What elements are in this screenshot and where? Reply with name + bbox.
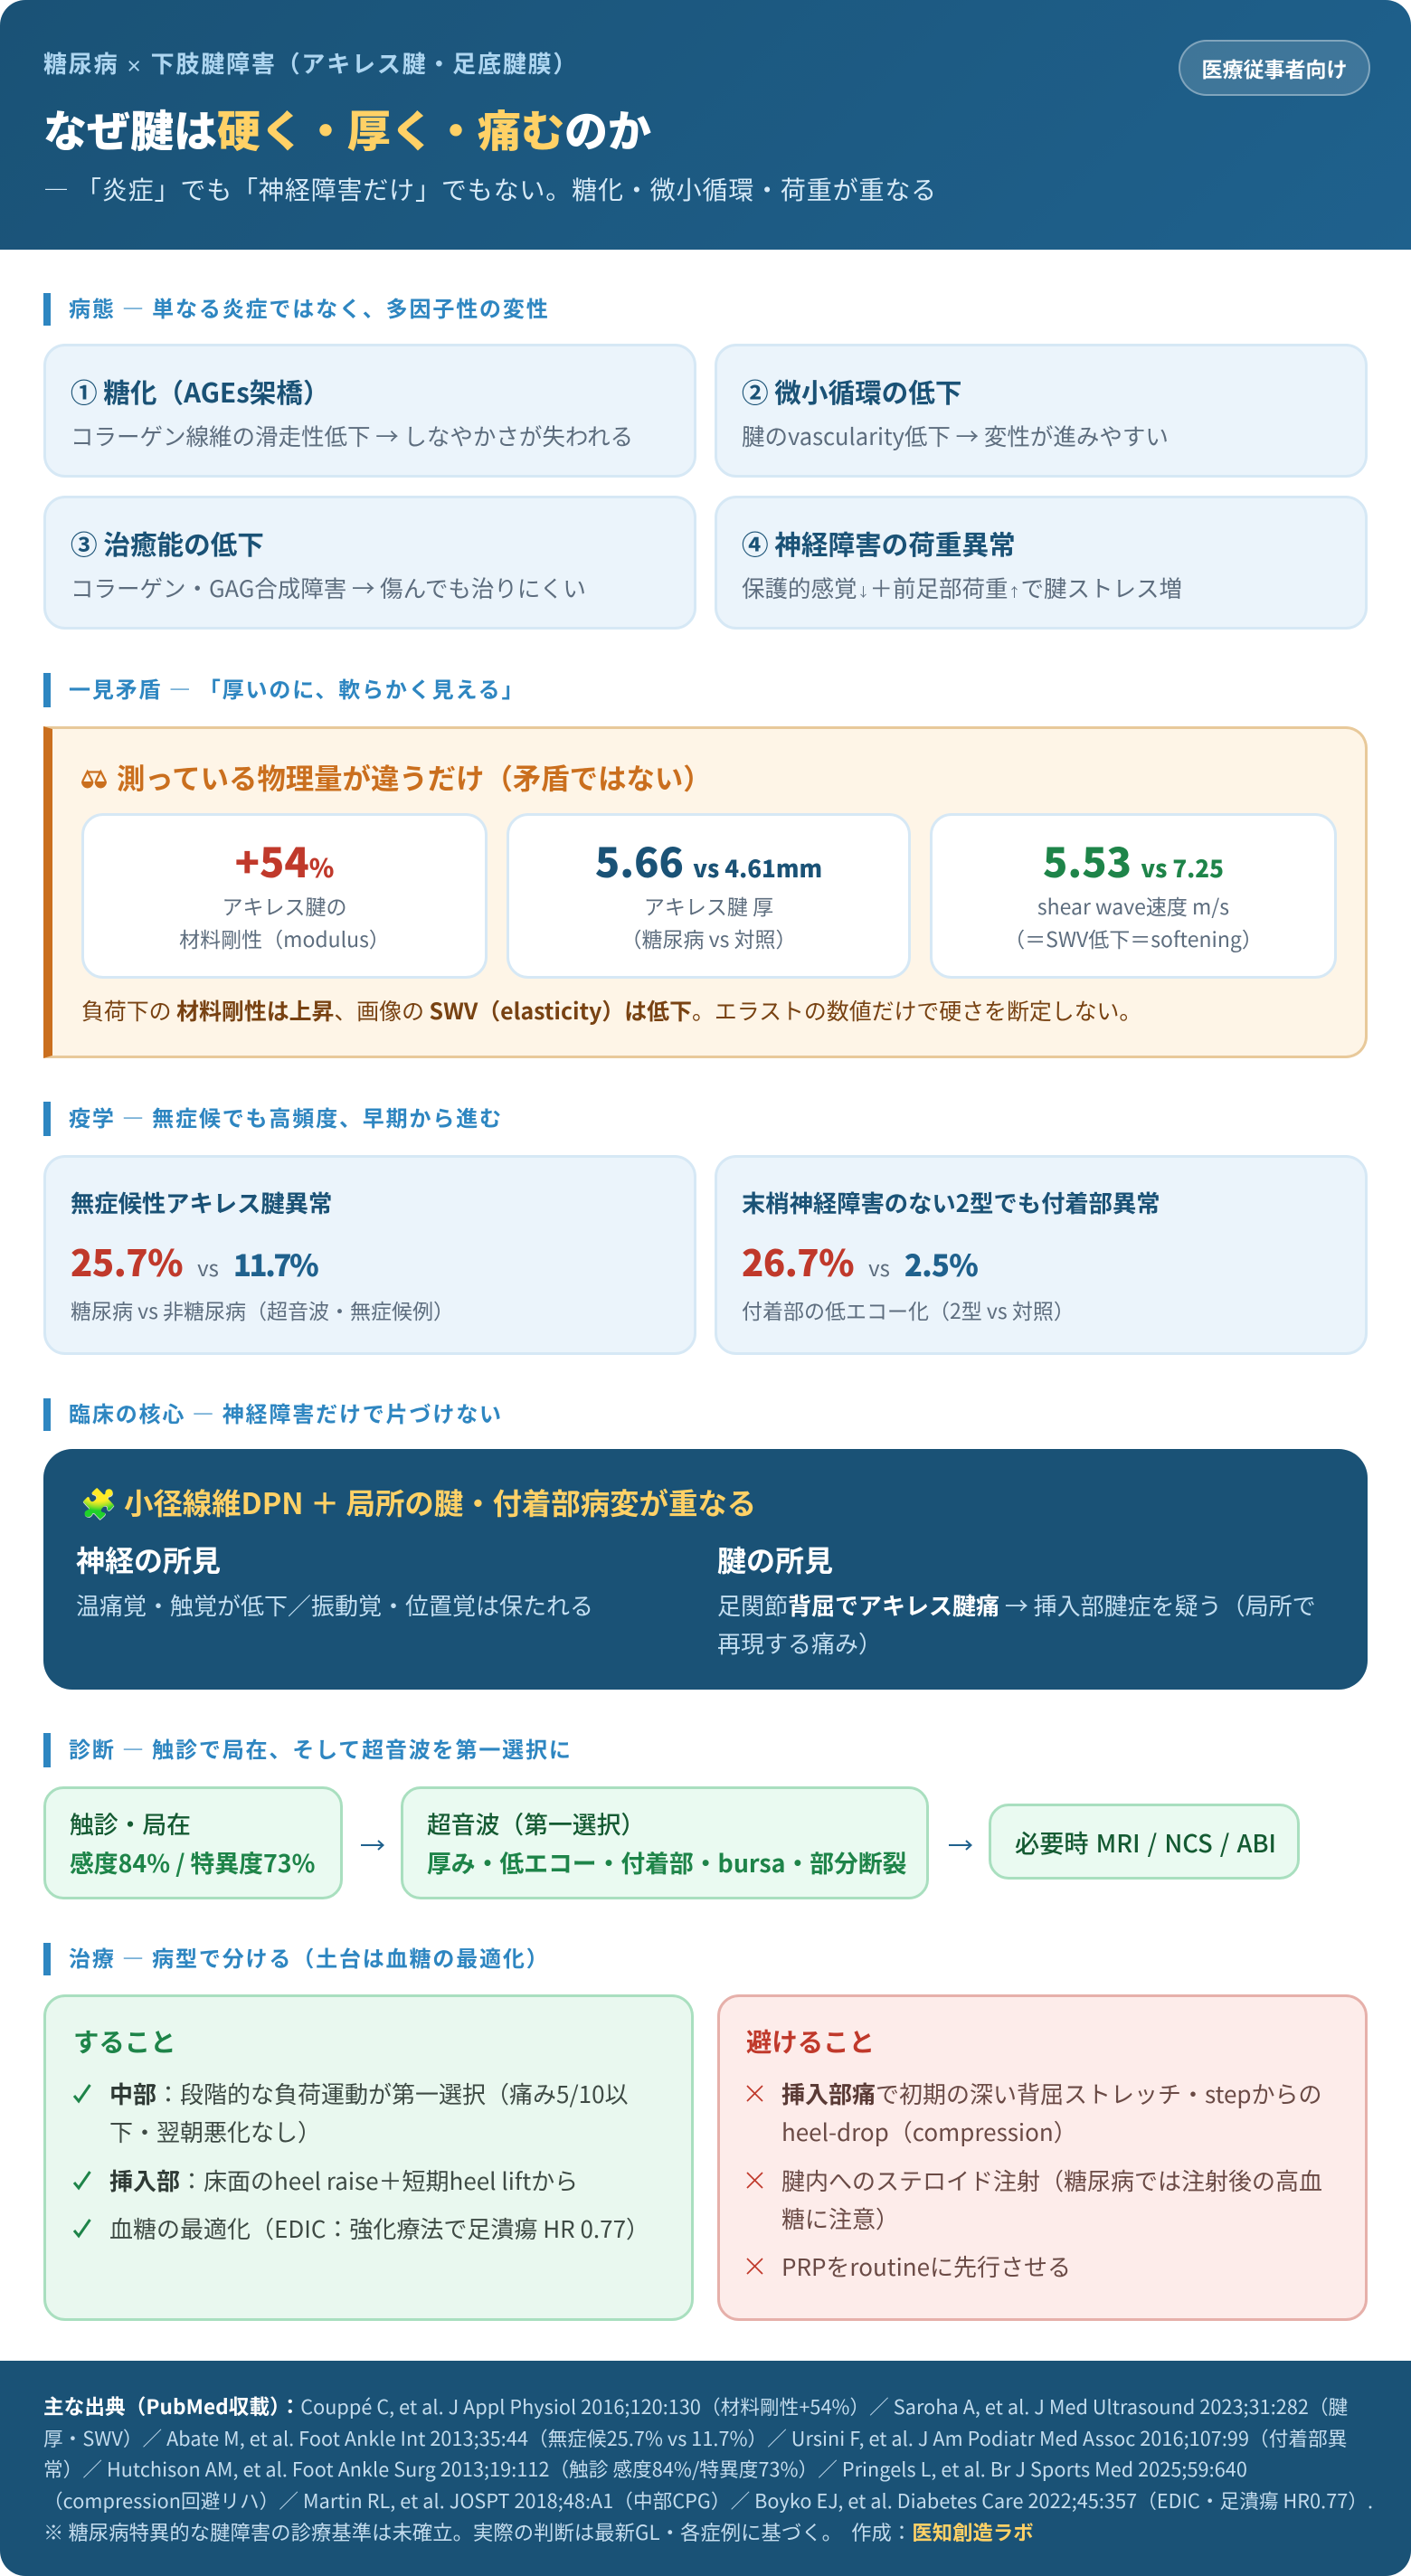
check mark [72, 2171, 91, 2191]
panel heading: 避けること [746, 2022, 875, 2060]
reference list: 常）／ Hutchison AM, et al. Foot Ankle Surg 2013;19:112（触診 感度84%/特異度73%）／ Pringels L, et al. Br J Sports Med 2025;59:640 [43, 2455, 1247, 2483]
panel: clinical core [43, 1449, 1368, 1690]
stat label: アキレス腱 厚 [644, 890, 773, 921]
item text [781, 2077, 1322, 2148]
section heading: epidemiology: 疫学 — 無症候でも高頻度、早期から進む [69, 1101, 503, 1132]
flow step: palpation [43, 1786, 343, 1899]
panel: avoid [717, 1994, 1368, 2321]
item text: 血糖の最適化（EDIC：強化療法で足潰瘍 HR 0.77） [109, 2211, 649, 2245]
flow step: ultrasound [401, 1786, 929, 1899]
panel title with puzzle icon: 小径線維DPN ＋ 局所の腱・付着部病変が重なる [124, 1481, 756, 1523]
item text: 糖に注意） [781, 2202, 899, 2235]
step detail: 感度84% / 特異度73% [70, 1844, 315, 1880]
reference list [43, 2391, 1373, 2546]
step title: 触診・局在 [70, 1805, 191, 1841]
stat label line 2: （糖尿病 vs 対照） [620, 923, 797, 953]
column heading: 神経の所見 [76, 1539, 221, 1580]
reference list: （compression回避リハ）／ Martin RL, et al. JOSPT 2018;48:A1（中部CPG）／ Boyko EJ, et al. Diabetes Care 2022;45:357（EDIC・足潰瘍 HR0.77）. [43, 2486, 1373, 2514]
card title: ② 微小循環の低下 [742, 372, 961, 411]
column: tendon findings [717, 1539, 1316, 1660]
column text: 足関節背屈でアキレス腱痛 → 挿入部腱症を疑う（局所で [717, 1588, 1316, 1622]
column heading: 腱の所見 [717, 1539, 833, 1580]
card body: コラーゲン・GAG合成障害 → 傷んでも治りにくい [71, 571, 586, 604]
audience badge [1179, 40, 1370, 96]
cross mark [747, 2085, 763, 2102]
comparison numbers: 26.7% vs 2.5% [742, 1235, 978, 1287]
item text: 挿入部：床面のheel raise＋短期heel liftから [109, 2164, 578, 2197]
section heading: pathology [43, 293, 948, 326]
stat label: アキレス腱の [223, 890, 347, 921]
card title: 無症候性アキレス腱異常 [71, 1184, 332, 1219]
card title: ④ 神経障害の荷重異常 [742, 524, 1016, 563]
arrow [949, 1840, 972, 1851]
section heading: pathology: 病態 — 単なる炎症ではなく、多因子性の変性 [69, 291, 550, 323]
stat label line 2: 材料剛性（modulus） [179, 923, 390, 953]
cross mark [747, 2258, 763, 2275]
comparison numbers: 25.7% vs 11.7% [71, 1235, 317, 1287]
panel: do [43, 1994, 694, 2321]
stat: thickness [507, 813, 911, 979]
card title: ① 糖化（AGEs架橋） [71, 372, 330, 411]
stat value: +54% [235, 830, 334, 889]
step detail: 厚み・低エコー・付着部・bursa・部分断裂 [427, 1844, 906, 1880]
card body: 腱のvascularity低下 → 変性が進みやすい [742, 419, 1169, 452]
section heading: apparent contradiction [43, 673, 948, 707]
title: なぜ腱は硬く・厚く・痛むのか [43, 96, 651, 159]
panel note: 負荷下の 材料剛性は上昇、画像の SWV（elasticity）は低下。エラストの数値だけで硬さを断定しない。 [81, 994, 1141, 1027]
section heading: apparent contradiction: 一見矛盾 — 「厚いのに、軟らかく見える」 [69, 672, 525, 704]
note: 付着部の低エコー化（2型 vs 対照） [742, 1294, 1075, 1325]
audience badge: 医療従事者向け [1201, 52, 1348, 83]
list item [72, 2077, 628, 2148]
item text: 下・翌朝悪化なし） [109, 2115, 321, 2148]
card: healing [43, 496, 696, 630]
card: glycation [43, 344, 696, 478]
list item [747, 2077, 1322, 2148]
section heading: treatment [43, 1943, 948, 1975]
reference list: ※ 糖尿病特異的な腱障害の診療基準は未確立。実際の判断は最新GL・各症例に基づく。 作成：医知創造ラボ [43, 2517, 1034, 2546]
section heading: clinical core: 臨床の核心 — 神経障害だけで片づけない [69, 1397, 503, 1428]
stat label line 2: （＝SWV低下＝softening） [1004, 923, 1263, 953]
list item [72, 2211, 649, 2245]
stat: modulus [81, 813, 488, 979]
reference list: 主な出典（PubMed収載）：Couppé C, et al. J Appl Physiol 2016;120:130（材料剛性+54%）／ Saroha A, et al. J Med Ultrasound 2023;31:282（腱 [43, 2391, 1348, 2420]
section heading: epidemiology [43, 1102, 948, 1136]
arrow [361, 1840, 384, 1851]
column text: 温痛覚・触覚が低下／振動覚・位置覚は保たれる [76, 1588, 593, 1622]
stat value: 5.66 vs 4.61mm [595, 830, 822, 889]
section heading: diagnosis [43, 1733, 948, 1767]
item text: 挿入部痛で初期の深い背屈ストレッチ・stepからの [781, 2077, 1322, 2110]
column: nerve findings [76, 1539, 593, 1622]
item text: PRPをroutineに先行させる [781, 2249, 1071, 2283]
list item [72, 2164, 578, 2197]
column text [717, 1588, 1316, 1660]
item text: heel-drop（compression） [781, 2115, 1077, 2148]
check mark [72, 2219, 91, 2238]
header banner [0, 0, 1411, 250]
list item [747, 2249, 1071, 2283]
stat: shear wave [930, 813, 1337, 979]
step text: 必要時 MRI / NCS / ABI [1015, 1823, 1276, 1860]
panel: physical quantities [43, 726, 1368, 1058]
item text [109, 2077, 628, 2148]
stat value: 5.53 vs 7.25 [1043, 830, 1224, 889]
subtitle: — 「炎症」でも「神経障害だけ」でもない。糖化・微小循環・荷重が重なる [43, 171, 937, 207]
card body: 保護的感覚↓＋前足部荷重↑で腱ストレス増 [742, 571, 1182, 604]
section heading: diagnosis: 診断 — 触診で局在、そして超音波を第一選択に [69, 1732, 573, 1764]
eyebrow text: 糖尿病 × 下肢腱障害（アキレス腱・足底腱膜） [43, 46, 578, 80]
card: neuropathy load [715, 496, 1368, 630]
section heading: clinical core [43, 1398, 948, 1431]
check mark [72, 2084, 91, 2104]
list item [747, 2164, 1322, 2235]
step title: 超音波（第一選択） [427, 1805, 645, 1841]
card title: 末梢神経障害のない2型でも付着部異常 [742, 1184, 1160, 1219]
cross mark [747, 2172, 763, 2189]
card body: コラーゲン線維の滑走性低下 → しなやかさが失われる [71, 419, 633, 452]
column text: 再現する痛み） [717, 1626, 882, 1660]
footer: sources [0, 2361, 1411, 2576]
card: insertion abnormality [715, 1155, 1368, 1355]
item text: 腱内へのステロイド注射（糖尿病では注射後の高血 [781, 2164, 1322, 2197]
card: microcirculation [715, 344, 1368, 478]
flow step: additional tests [989, 1804, 1300, 1880]
reference list: 厚・SWV）／ Abate M, et al. Foot Ankle Int 2013;35:44（無症候25.7% vs 11.7%）／ Ursini F, et al. J Am Podiatr Med Assoc 2016;107:99（付着部異 [43, 2424, 1347, 2451]
panel title with scale icon: 測っている物理量が違うだけ（矛盾ではない） [117, 757, 712, 798]
item text [781, 2164, 1322, 2235]
note: 糖尿病 vs 非糖尿病（超音波・無症候例） [71, 1294, 454, 1325]
section heading: treatment: 治療 — 病型で分ける（土台は血糖の最適化） [69, 1941, 550, 1973]
card: asymptomatic abnormality [43, 1155, 696, 1355]
item text: 中部：段階的な負荷運動が第一選択（痛み5/10以 [109, 2077, 628, 2110]
panel heading: すること [73, 2022, 176, 2060]
stat label: shear wave速度 m/s [1037, 890, 1229, 921]
panel title with puzzle icon: 🧩 [80, 1481, 117, 1523]
card title: ③ 治癒能の低下 [71, 524, 264, 563]
